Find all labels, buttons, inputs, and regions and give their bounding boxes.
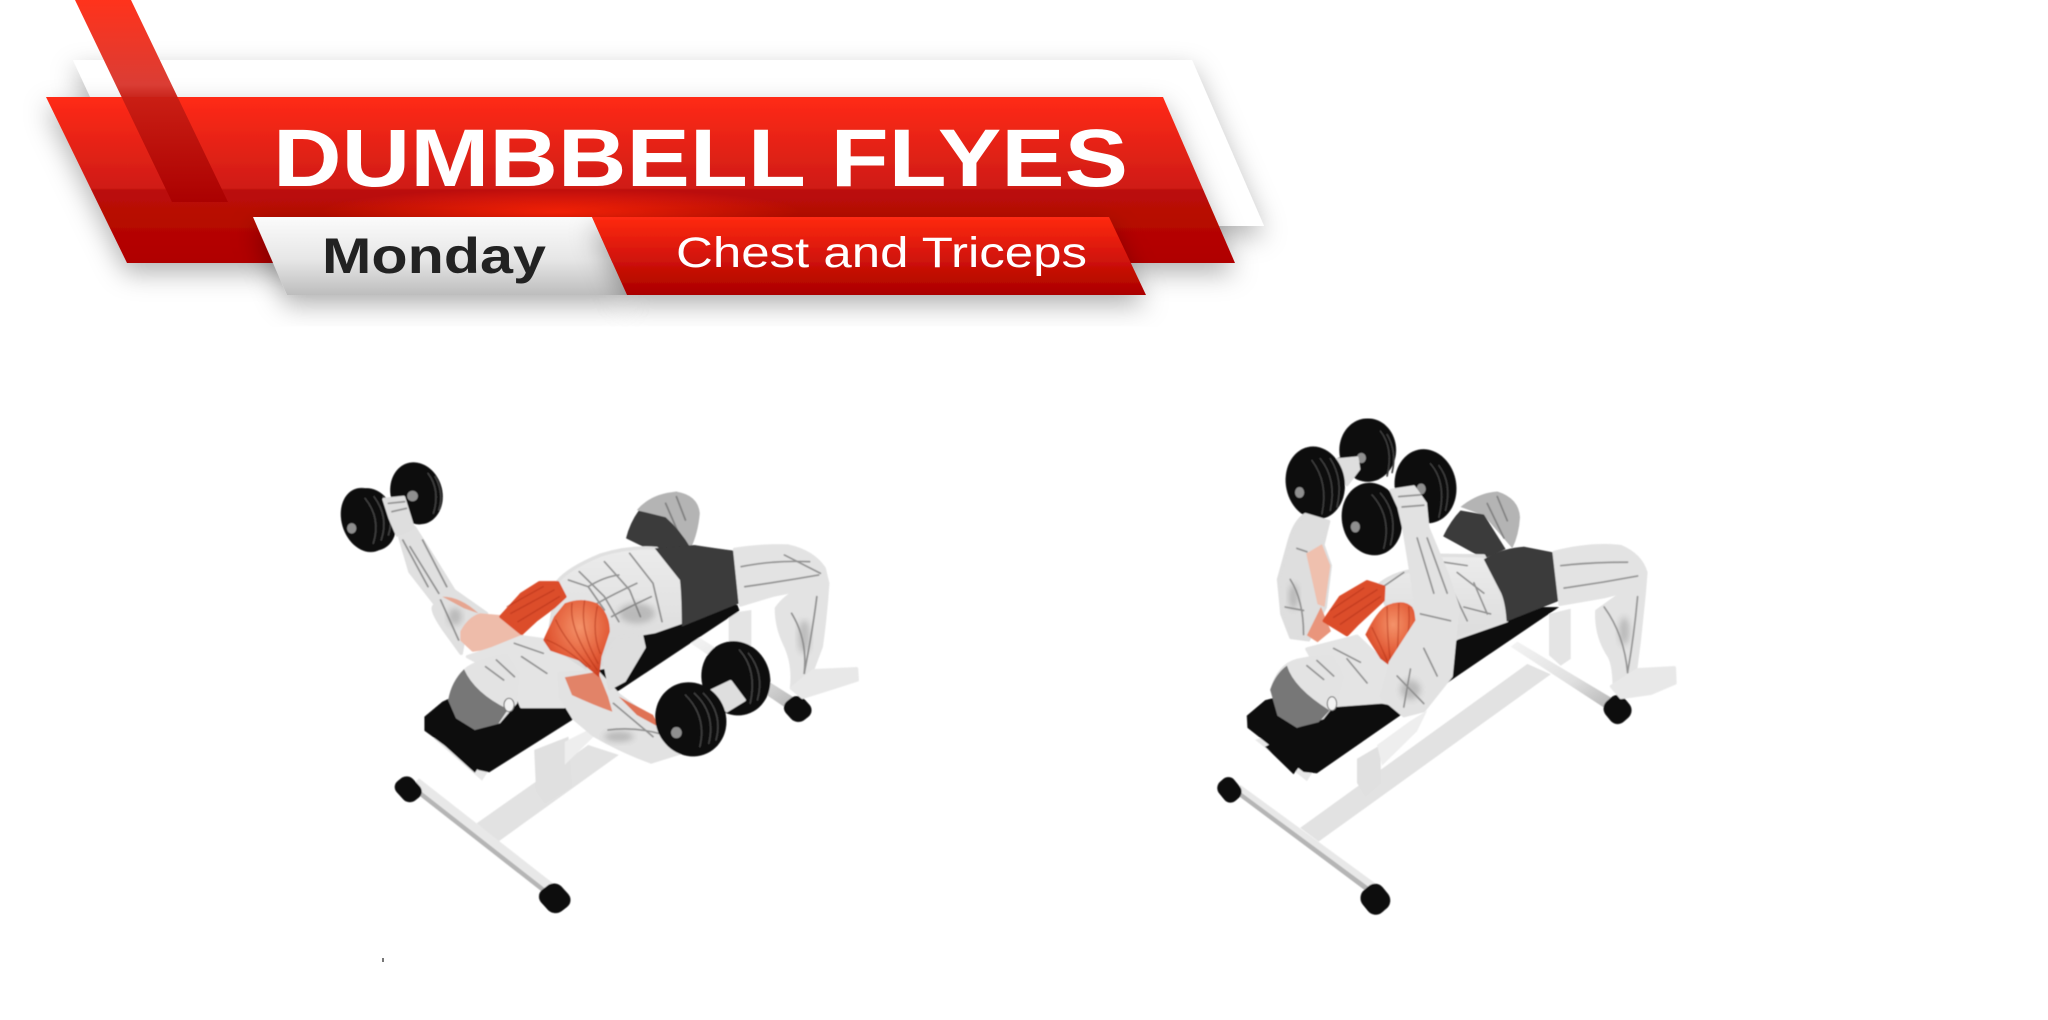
neck and chest: [1307, 636, 1404, 705]
shorts: [655, 545, 739, 627]
title banner: [46, 0, 1264, 295]
bench frame: [1214, 609, 1635, 919]
left arm: [400, 527, 486, 653]
red glow: [320, 188, 800, 236]
near fist: [1391, 487, 1428, 528]
far leg: [1443, 491, 1520, 559]
muscle group label: Chest and Triceps: [676, 229, 1087, 277]
left pectoral muscle: [501, 583, 565, 633]
far fist: [1332, 458, 1359, 485]
illustration: arms raised (top position): [1214, 418, 1675, 919]
bench pad: [424, 597, 739, 773]
near dumbbell: [1334, 443, 1463, 562]
day tab: [253, 217, 627, 295]
right pectoral muscle: [1365, 602, 1416, 666]
head: [448, 643, 547, 730]
bench frame: [391, 610, 815, 917]
torso: [550, 548, 684, 673]
near pectoral muscle: [543, 600, 610, 677]
left shoulder: [462, 615, 522, 650]
left arm: [1279, 515, 1331, 642]
left dumbbell: [333, 458, 449, 557]
small stray mark: [382, 958, 384, 962]
bench foot caps: [1214, 691, 1635, 919]
illustration: arms extended (start position): [333, 458, 857, 917]
far dumbbell: [1279, 418, 1396, 525]
bench foot caps: [391, 692, 815, 917]
diagonal red stripe: [75, 0, 228, 202]
neck and upper chest: [468, 637, 583, 707]
near shoulder: [604, 634, 644, 688]
bench pad: [1247, 607, 1559, 774]
left fist: [384, 497, 413, 535]
far leg: [626, 492, 700, 553]
left pectoral muscle: [1324, 582, 1384, 635]
near leg: [1554, 546, 1675, 697]
near dumbbell: [647, 635, 778, 763]
near arm: [1381, 487, 1458, 716]
shorts: [1484, 547, 1559, 621]
near leg: [735, 546, 857, 697]
near fist: [712, 682, 744, 711]
near arm: [559, 672, 681, 762]
muscle group tab: [592, 217, 1146, 295]
main red banner: [46, 97, 1235, 263]
head: [1270, 648, 1367, 728]
torso: [1377, 555, 1507, 662]
white back panel: [73, 60, 1264, 226]
day label: Monday: [322, 228, 546, 284]
heading: DUMBBELL FLYES: [273, 113, 1128, 204]
